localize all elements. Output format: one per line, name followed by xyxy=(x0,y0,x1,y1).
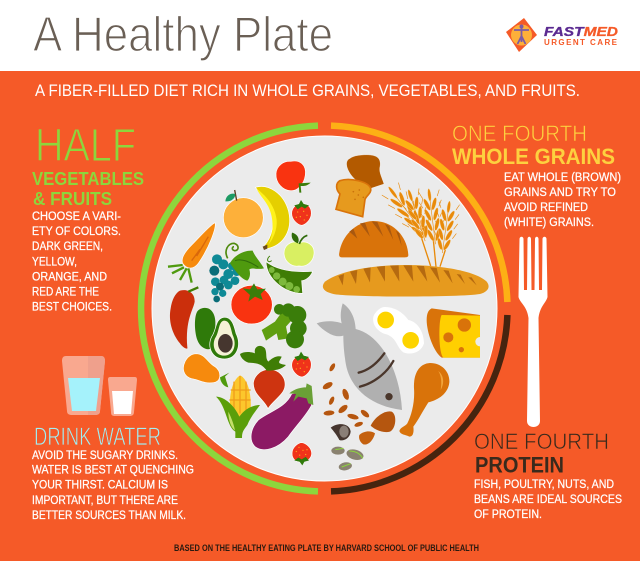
heading: fruits: & FRUITS xyxy=(33,188,112,209)
icon: grape leaves xyxy=(226,243,264,281)
vegetables lower group xyxy=(170,283,313,465)
heading: protein: PROTEIN xyxy=(475,452,564,478)
icon: pistachios xyxy=(331,447,365,471)
icon: corn xyxy=(216,375,260,438)
text block: vegetables advice: ETY OF COLORS. xyxy=(32,224,121,238)
icon: wheat xyxy=(380,180,461,267)
ring: half vegetables and fruits xyxy=(141,126,318,491)
text block: vegetables advice: RED ARE THE xyxy=(32,284,99,298)
icon: carrot xyxy=(168,223,215,283)
protein group xyxy=(317,303,485,471)
logo tagline: URGENT CARE xyxy=(544,38,618,47)
title: A Healthy Plate xyxy=(33,8,333,62)
header band xyxy=(0,0,640,71)
vegetables and fruits upper group xyxy=(168,161,314,302)
text block: vegetables advice: DARK GREEN, xyxy=(32,239,103,253)
text block: vegetables advice xyxy=(32,209,121,314)
text block: water advice xyxy=(32,448,194,522)
icon: almonds xyxy=(321,362,371,428)
text block: protein advice xyxy=(474,477,622,521)
text block: water advice: BETTER SOURCES THAN MILK. xyxy=(32,508,186,522)
text block: protein advice: OF PROTEIN. xyxy=(474,507,542,521)
icon: red apple xyxy=(276,161,311,193)
icon: baguette xyxy=(323,265,489,296)
plate xyxy=(152,136,497,481)
ring: one fourth grains xyxy=(331,126,507,302)
panel: drink water xyxy=(32,423,194,522)
heading: one fourth: ONE FOURTH xyxy=(452,121,587,146)
icon: grapes xyxy=(209,254,241,302)
heading: drink water: DRINK WATER xyxy=(34,423,161,451)
icon: green pepper xyxy=(195,308,215,349)
text block: vegetables advice: ORANGE, AND xyxy=(32,270,107,284)
icon: red chili pepper xyxy=(170,287,198,349)
icon: strawberry xyxy=(292,200,311,225)
icon: eggs xyxy=(373,307,424,354)
icon: tomato xyxy=(231,283,272,324)
footer source note: BASED ON THE HEALTHY EATING PLATE BY HARVARD SCHOOL OF PUBLIC HEALTH xyxy=(174,543,479,553)
icon: strawberry xyxy=(292,352,311,377)
text block: grains advice: GRAINS AND TRY TO xyxy=(504,185,616,199)
icon: fish xyxy=(317,303,402,410)
logo: FastMed Urgent Care xyxy=(506,18,618,52)
text block: water advice: WATER IS BEST AT QUENCHING xyxy=(32,462,194,476)
icon: fork xyxy=(518,237,548,427)
text block: grains advice: AVOID REFINED xyxy=(504,200,588,214)
heading: vegetables: VEGETABLES xyxy=(32,168,144,189)
icon: pea pod xyxy=(266,256,313,293)
heading: half: HALF xyxy=(35,119,136,171)
icon: round loaf xyxy=(339,221,408,257)
text block: water advice: YOUR THIRST. CALCIUM IS xyxy=(32,478,168,492)
ring: one fourth protein xyxy=(331,315,507,491)
icon: milk glass xyxy=(108,377,137,416)
icon: eggplant xyxy=(251,383,313,450)
icon: avocado xyxy=(210,317,238,359)
text block: water advice: AVOID THE SUGARY DRINKS. xyxy=(32,448,178,462)
icon: orange xyxy=(223,190,263,238)
icon: logo diamond xyxy=(506,18,537,52)
icon: hazelnuts and chestnut xyxy=(331,411,395,445)
icon: chicken drumstick xyxy=(399,363,449,437)
text block: vegetables advice: BEST CHOICES. xyxy=(32,300,112,314)
panel: protein xyxy=(474,429,622,521)
heading: one fourth: ONE FOURTH xyxy=(474,429,609,454)
icon: strawberry xyxy=(292,443,312,465)
panel: half vegetables and fruits xyxy=(32,119,144,314)
icon: dark bread slice xyxy=(347,155,384,189)
icon: light bread slice xyxy=(336,180,371,217)
icon: beet xyxy=(240,346,286,409)
logo name: FAST MED xyxy=(544,25,618,39)
text block: protein advice: FISH, POULTRY, NUTS, AND xyxy=(474,477,614,491)
icon: green apple xyxy=(284,233,314,266)
subtitle: A FIBER-FILLED DIET RICH IN WHOLE GRAINS, VEGETABLES, AND FRUITS. xyxy=(35,81,580,100)
whole grains group xyxy=(323,155,489,296)
text block: water advice: IMPORTANT, BUT THERE ARE xyxy=(32,493,178,507)
text block: grains advice: (WHITE) GRAINS. xyxy=(504,215,594,229)
icon: banana xyxy=(255,186,290,250)
text block: vegetables advice: CHOOSE A VARI- xyxy=(32,209,121,223)
icon: water glass xyxy=(62,356,105,415)
icon: pear xyxy=(183,354,229,387)
heading: whole grains: WHOLE GRAINS xyxy=(452,144,615,169)
text block: vegetables advice: YELLOW, xyxy=(32,254,77,268)
icon: broccoli xyxy=(262,303,307,348)
text block: grains advice: EAT WHOLE (BROWN) xyxy=(504,170,621,184)
icon: cheese xyxy=(427,308,485,358)
text block: grains advice xyxy=(504,170,621,229)
panel: whole grains xyxy=(452,121,621,229)
plate with ring xyxy=(141,126,507,491)
